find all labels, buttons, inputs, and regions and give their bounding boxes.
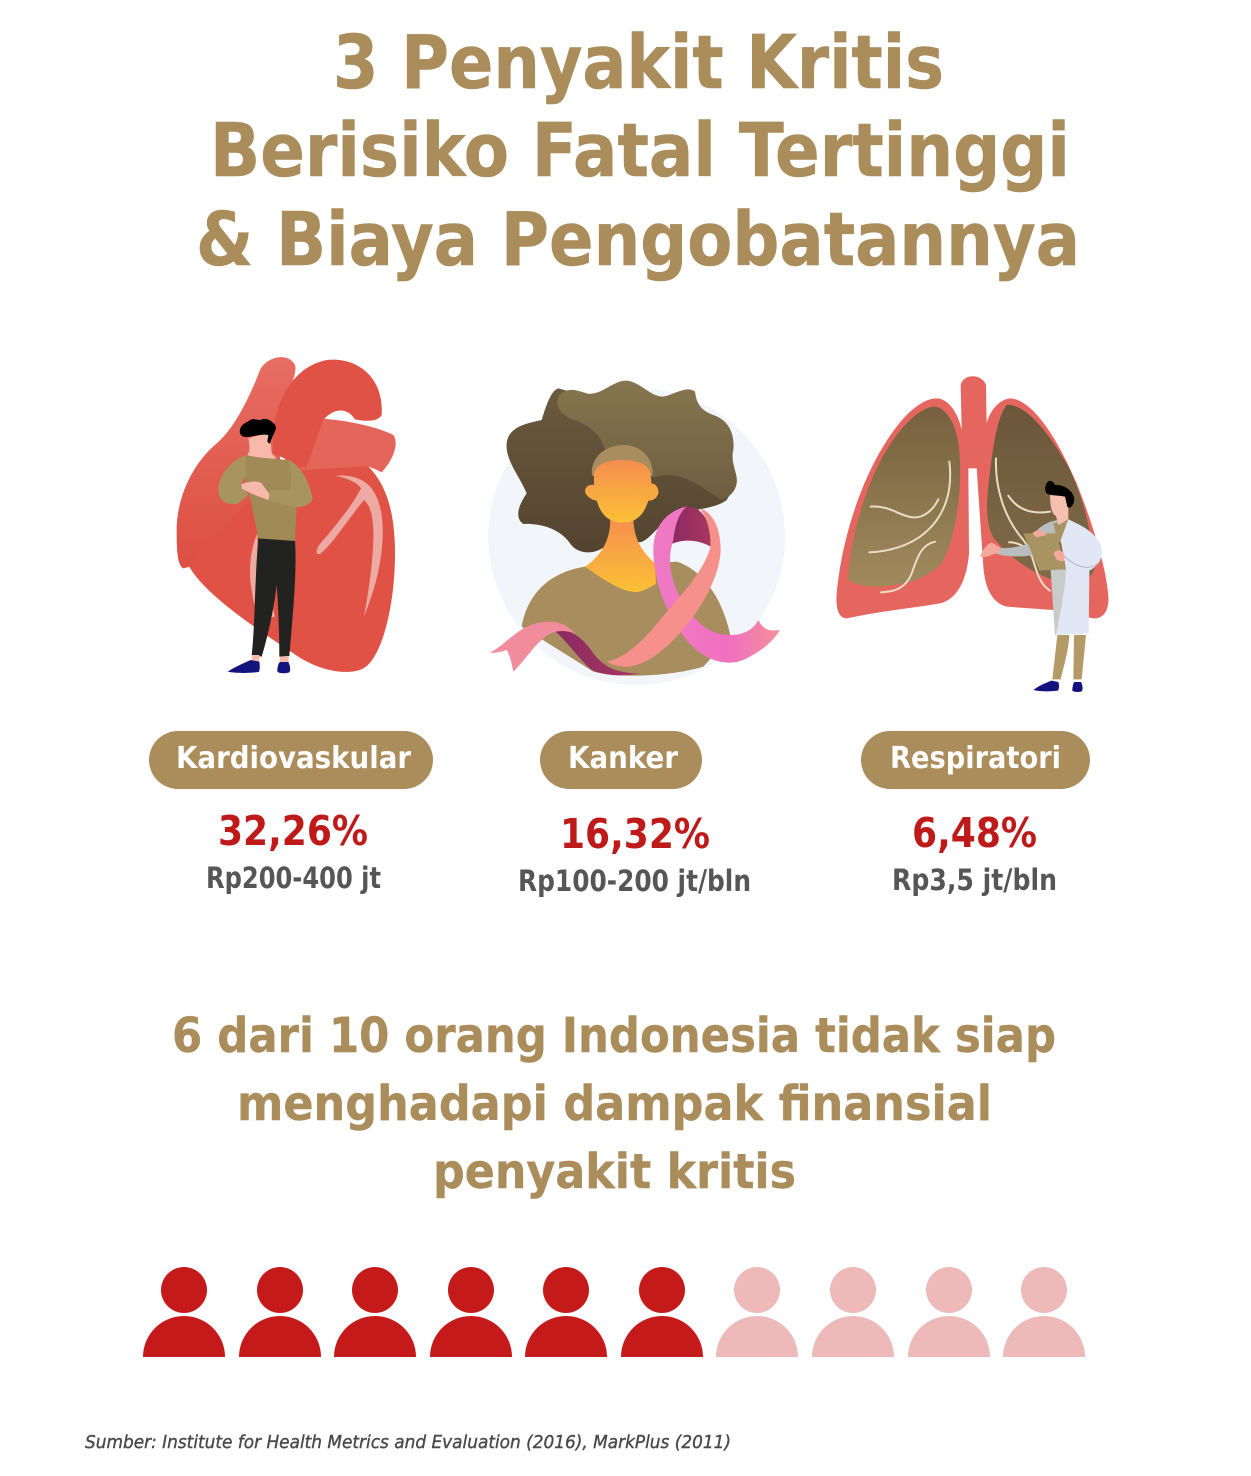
subheading: 6 dari 10 orang Indonesia tidak siap xyxy=(172,1008,1056,1064)
label: Kanker xyxy=(540,731,702,789)
stat: Respiratori: 6,48% xyxy=(912,809,1037,857)
title: & Biaya Pengobatannya xyxy=(196,197,1080,283)
title: Berisiko Fatal Tertinggi xyxy=(210,108,1070,194)
pictogram: 6 of 10 people xyxy=(143,1267,1085,1357)
face xyxy=(585,460,658,523)
label: Kanker: Kanker xyxy=(568,741,678,776)
stat: Kardiovaskular: 32,26% xyxy=(218,807,368,855)
label: Kardiovaskular xyxy=(149,731,433,789)
stat: Kardiovaskular: Rp200-400 jt xyxy=(206,861,381,895)
man figure xyxy=(218,419,313,673)
stat: Respiratori: Rp3,5 jt/bln xyxy=(892,863,1057,897)
bronchi xyxy=(869,458,1050,592)
title: 3 Penyakit Kritis xyxy=(333,20,944,106)
stat: Kanker xyxy=(518,810,751,898)
label: Kardiovaskular: Kardiovaskular xyxy=(176,741,411,776)
title xyxy=(196,20,1080,283)
doctor figure xyxy=(980,481,1102,692)
label: Respiratori xyxy=(861,731,1090,789)
neck xyxy=(585,517,656,592)
stat: Kanker: 16,32% xyxy=(560,810,710,858)
stat: Respiratori xyxy=(892,809,1057,897)
subheading: penyakit kritis xyxy=(433,1144,796,1200)
stat: Kardiovaskular xyxy=(206,807,381,895)
icon: woman with cancer ribbon xyxy=(488,381,785,685)
subheading: menghadapi dampak finansial xyxy=(237,1076,992,1132)
source note: Sumber: Institute for Health Metrics and Evaluation (2016), MarkPlus (2011) xyxy=(85,1432,731,1453)
sweater xyxy=(522,562,731,676)
label: Respiratori: Respiratori xyxy=(890,741,1061,776)
stat: Kanker: Rp100-200 jt/bln xyxy=(518,864,751,898)
icon: heart with man xyxy=(177,357,396,673)
subheading xyxy=(172,1008,1056,1200)
icon: lungs with doctor xyxy=(836,376,1108,692)
